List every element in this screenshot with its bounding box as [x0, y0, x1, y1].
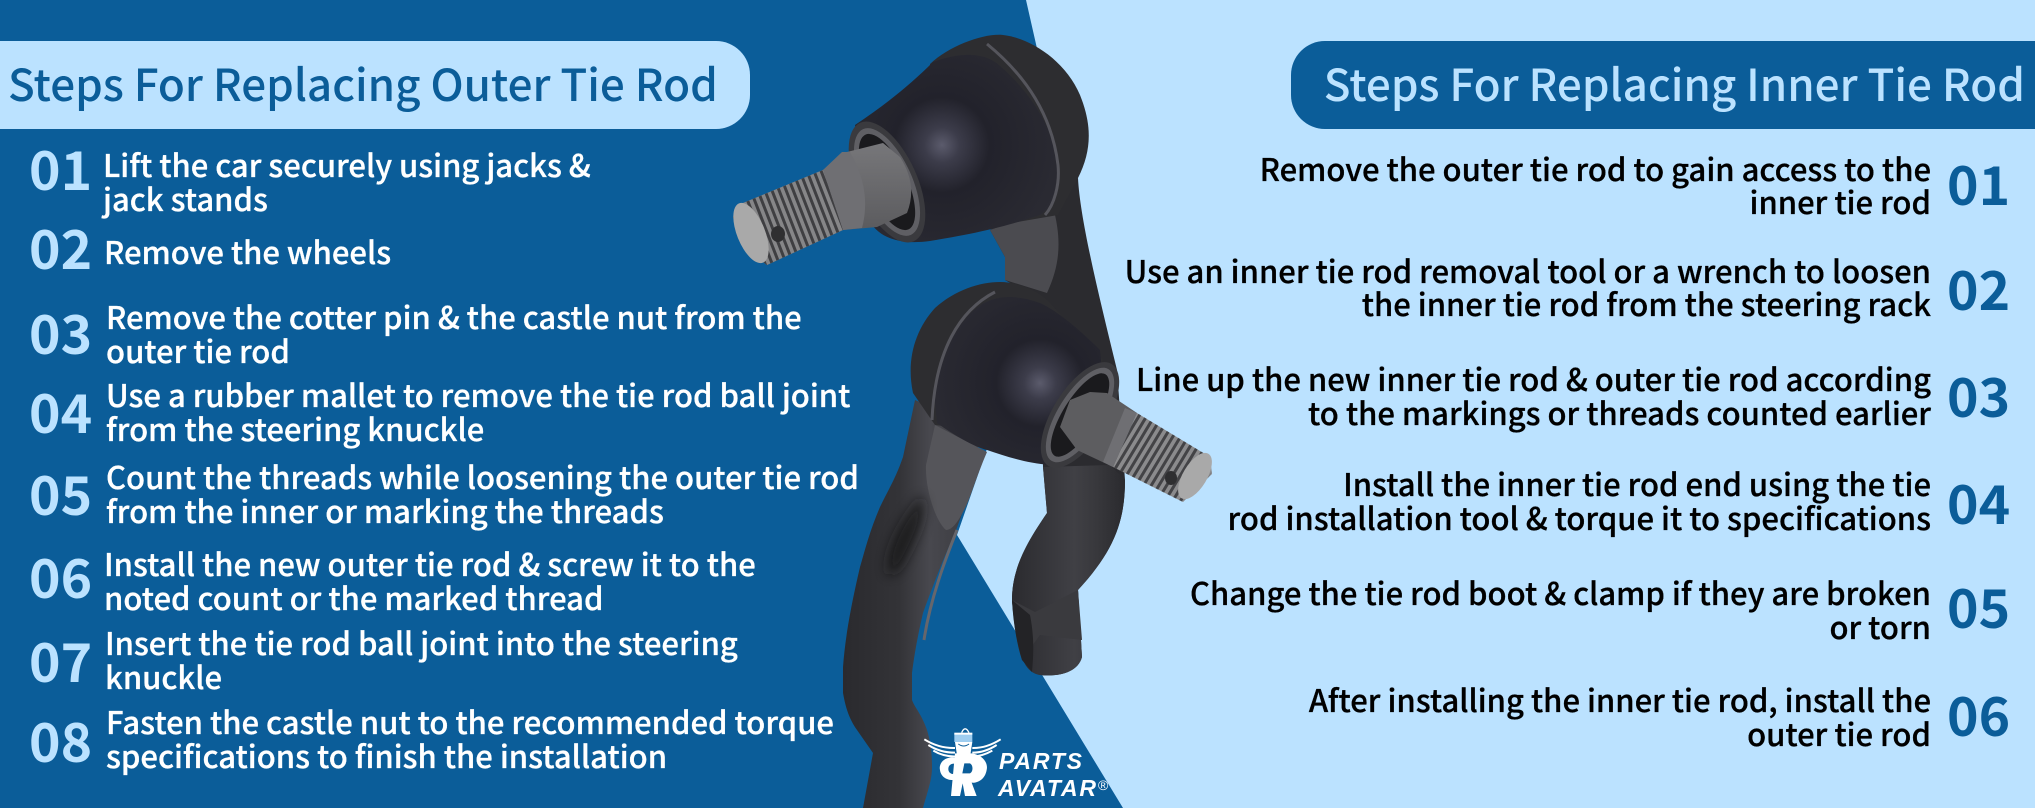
step 06 text: Install the new outer tie rod & screw it to the	[104, 540, 756, 585]
upper boot cap	[930, 35, 1089, 225]
upper arm light panel	[990, 207, 1059, 293]
step 04 text	[106, 371, 850, 450]
lower arm shadow	[887, 495, 924, 575]
step 07 text	[105, 619, 738, 698]
step number 07: 07	[29, 621, 92, 698]
step number 06: 06	[29, 537, 92, 614]
heading: outer tie rod: Steps For Replacing Outer Tie Rod	[8, 50, 718, 114]
step 02 text: Use an inner tie rod removal tool or a wrench to loosen	[1125, 246, 1931, 292]
step 07 text: Insert the tie rod ball joint into the steering	[105, 619, 738, 664]
upper arm	[990, 178, 1125, 675]
step number 01: 01	[29, 128, 92, 206]
step 03 text: Line up the new inner tie rod & outer tie rod according	[1136, 355, 1931, 400]
step 02 text: the inner tie rod from the steering rack	[1362, 280, 1931, 325]
step 01 text: Remove the outer tie rod to gain access to the	[1260, 144, 1931, 190]
logo wordmark: PARTS	[999, 748, 1084, 774]
lower boot cap	[911, 282, 1103, 440]
lower ring	[1025, 350, 1135, 480]
step 04 text	[1228, 460, 1931, 538]
step 08 text: specifications to finish the installation	[106, 732, 667, 776]
step 04 text: from the steering knuckle	[106, 404, 484, 450]
lower tie rod end	[843, 282, 1220, 808]
step number 03: 03	[1947, 356, 2010, 433]
lower long arm	[843, 400, 983, 808]
upper boot dome	[855, 55, 1058, 242]
step 06 text: After installing the inner tie rod, install the	[1309, 676, 1931, 721]
step number 01: 01	[1947, 144, 2010, 221]
step number 02: 02	[29, 208, 92, 285]
logo: Parts Avatar: ®	[1098, 777, 1109, 793]
step 05 text	[106, 453, 859, 532]
step number 03: 03	[29, 293, 92, 370]
step 04 text: Use a rubber mallet to remove the tie rod ball joint	[106, 371, 850, 416]
step number 05: 05	[29, 454, 92, 531]
step 03 text	[106, 293, 802, 372]
step 01 text: inner tie rod	[1750, 178, 1931, 223]
step 05 text	[1190, 569, 1931, 648]
heading: inner tie rod	[1291, 41, 2035, 129]
step number 04: 04	[1947, 463, 2010, 540]
step 02 text: Remove the wheels	[104, 228, 391, 272]
step 01 text: Lift the car securely using jacks &	[103, 141, 591, 186]
logo: Parts Avatar: AVATAR	[997, 775, 1098, 801]
lower arm light panel	[926, 425, 987, 530]
step 04 text: rod installation tool & torque it to specifications	[1228, 494, 1931, 538]
step 06 text	[1308, 676, 1931, 754]
step 06 text: outer tie rod	[1747, 710, 1931, 754]
step 03 text: outer tie rod	[106, 326, 290, 372]
lower boot dome	[935, 297, 1105, 465]
heading: outer tie rod	[0, 41, 750, 129]
upper tie rod end	[720, 35, 1125, 675]
heading: inner tie rod: Steps For Replacing Inner Tie Rod	[1324, 50, 2025, 114]
upper ring	[833, 110, 941, 254]
step 06 text	[104, 540, 756, 618]
step 03 text: Remove the cotter pin & the castle nut from the	[106, 293, 802, 338]
step 05 text: Count the threads while loosening the outer tie rod	[106, 453, 859, 498]
upper arm lower section	[1012, 465, 1125, 675]
step number 05: 05	[1947, 567, 2010, 644]
step number 06: 06	[1947, 675, 2010, 752]
step 08 text: Fasten the castle nut to the recommended torque	[106, 698, 834, 743]
step 04 text: Install the inner tie rod end using the tie	[1343, 460, 1931, 505]
lower stud	[1060, 392, 1137, 467]
step 05 text: Change the tie rod boot & clamp if they are broken	[1190, 569, 1931, 614]
step 07 text: knuckle	[105, 652, 222, 698]
panel: outer tie rod steps	[0, 41, 859, 778]
step 03 text	[1136, 355, 1932, 434]
upper stud	[733, 143, 911, 265]
logo emblem	[924, 729, 1001, 796]
step 01 text: jack stands	[103, 174, 268, 220]
step 06 text: noted count or the marked thread	[104, 574, 604, 618]
step number 02: 02	[1947, 249, 2010, 326]
step 05 text: from the inner or marking the threads	[106, 486, 664, 532]
step 02 text	[1125, 246, 1931, 325]
step 05 text: or torn	[1829, 602, 1931, 648]
step number 04: 04	[29, 372, 92, 449]
step 03 text: to the markings or threads counted earlier	[1308, 388, 1931, 434]
step 01 text	[1260, 144, 1931, 223]
step 01 text	[101, 141, 591, 220]
illustration: two tie rod ends	[733, 34, 1212, 808]
step 08 text	[106, 698, 834, 776]
step number 08: 08	[29, 701, 92, 778]
